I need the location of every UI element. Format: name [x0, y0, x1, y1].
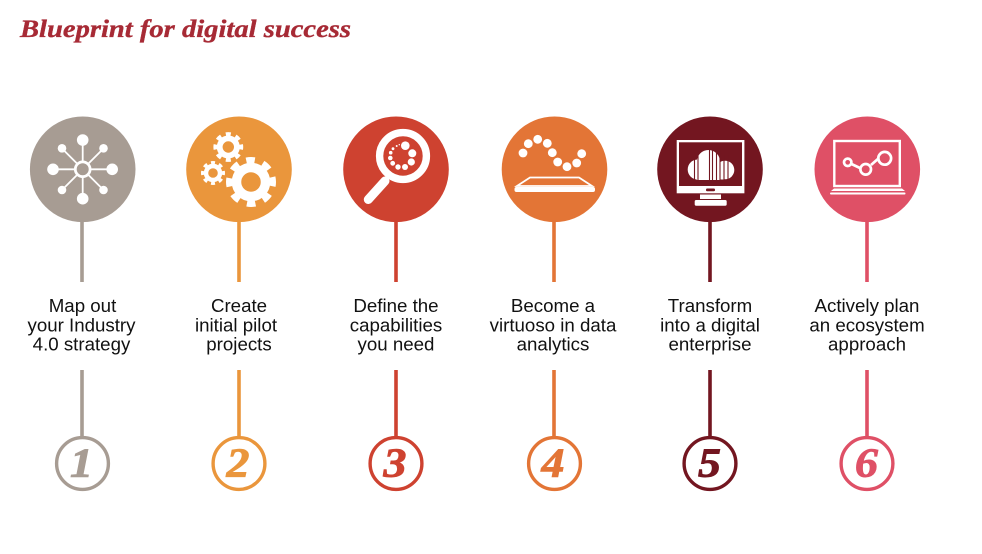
label: initial pilot: [195, 314, 278, 335]
label: Map out: [49, 295, 117, 316]
label: enterprise: [668, 334, 752, 354]
label: [490, 295, 617, 354]
label: [660, 295, 760, 354]
label: projects: [206, 334, 272, 354]
label: Transform: [668, 295, 752, 316]
label: Define the: [353, 295, 439, 316]
label: Become a: [511, 295, 596, 316]
connector lines: [237, 220, 241, 437]
number badge 6: [841, 438, 893, 489]
label: 4.0 strategy: [33, 334, 131, 354]
label: Actively plan: [815, 295, 919, 316]
label: Create: [211, 295, 267, 316]
step 4: data analytics: [490, 116, 617, 489]
label: you need: [358, 334, 434, 354]
connector lines: [552, 220, 556, 437]
title: Blueprint for digital success: [19, 16, 351, 43]
label: virtuoso in data: [490, 314, 617, 335]
number badge 5: [684, 438, 736, 489]
icon: network hub: [30, 116, 136, 222]
number badge 4: 4: [540, 441, 564, 486]
label: capabilities: [350, 314, 442, 335]
label: [195, 295, 278, 354]
label: approach: [828, 334, 906, 354]
number badge 1: [57, 438, 108, 489]
icon: monitor with cloud: [657, 116, 763, 222]
connector lines: [708, 220, 712, 437]
step 5: digital enterprise: [657, 116, 763, 489]
number badge 2: [213, 438, 265, 489]
label: [350, 295, 442, 354]
step 3: define capabilities: [343, 116, 449, 489]
step 6: ecosystem approach: [809, 116, 925, 489]
icon: laptop with line chart: [814, 116, 920, 222]
number badge 3: [370, 438, 422, 489]
connector lines: [865, 220, 869, 437]
icon: tablet with data dots: [502, 116, 607, 222]
number badge 2: 2: [225, 441, 249, 486]
connector lines: [80, 220, 84, 437]
label: an ecosystem: [809, 314, 925, 335]
number badge 3: 3: [382, 441, 406, 486]
number badge 1: 1: [70, 441, 93, 486]
number badge 5: 5: [698, 441, 721, 486]
label: into a digital: [660, 314, 760, 335]
label: [27, 295, 136, 354]
step 1: map out strategy: [27, 116, 136, 489]
icon: gears: [186, 116, 292, 222]
number badge 4: [529, 438, 580, 489]
icon: magnifying glass: [343, 116, 449, 222]
label: [809, 295, 925, 354]
number badge 6: 6: [855, 441, 878, 486]
connector lines: [394, 220, 398, 437]
step 2: create pilot projects: [186, 116, 292, 489]
label: analytics: [517, 334, 589, 354]
label: your Industry: [27, 314, 136, 335]
